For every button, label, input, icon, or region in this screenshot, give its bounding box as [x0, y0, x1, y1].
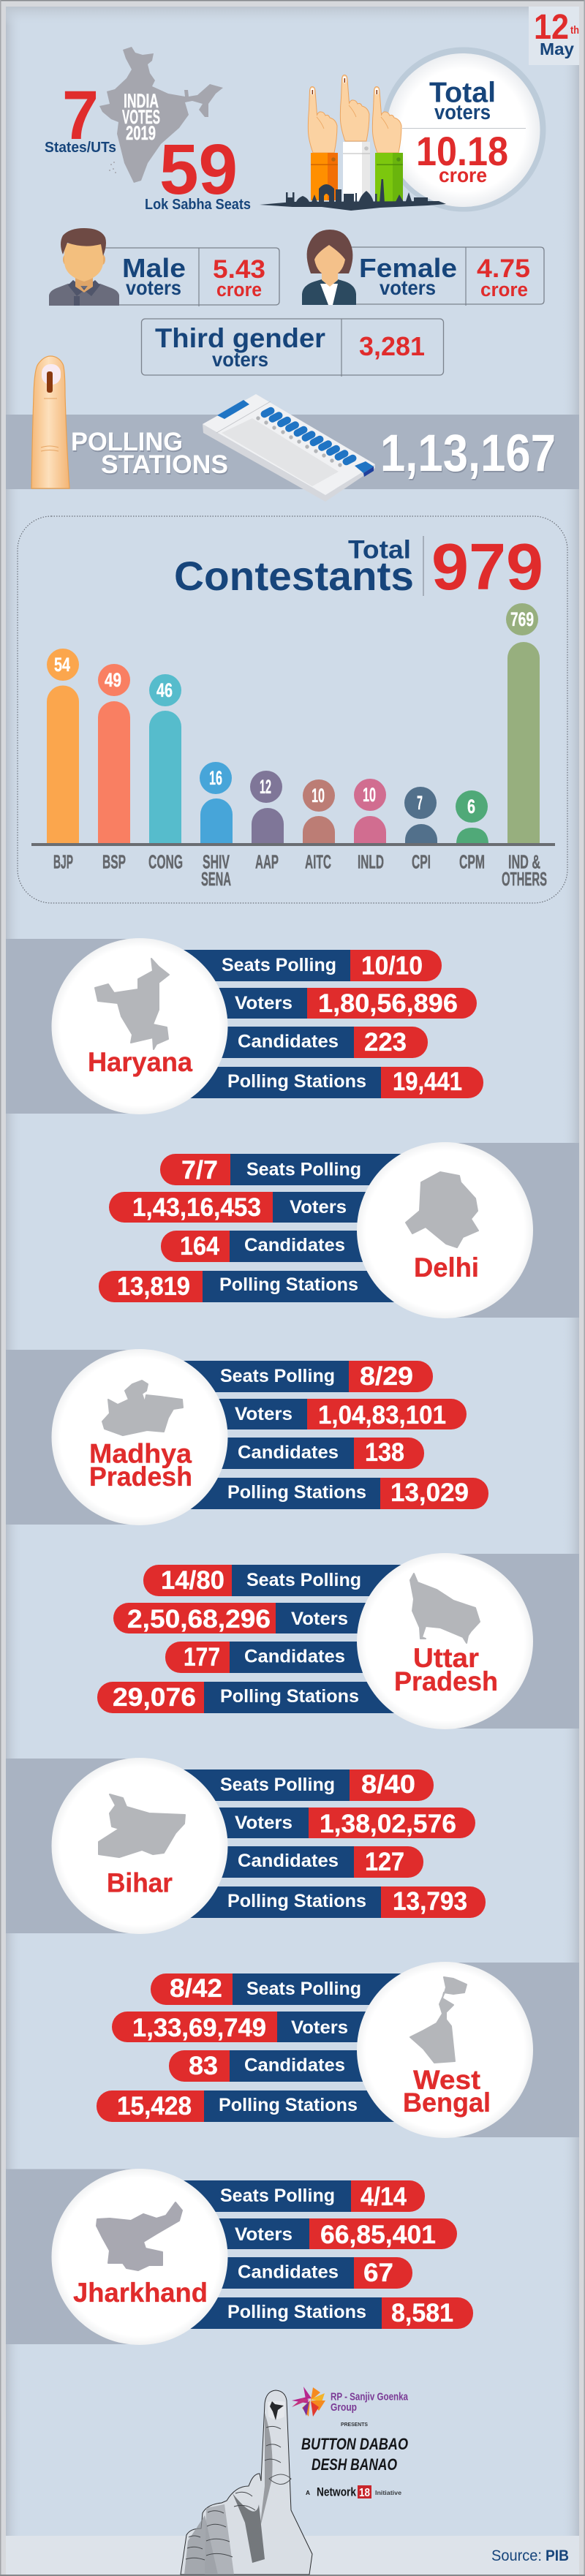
- stat: 7 states: [45, 77, 116, 156]
- row: candidates: 164: [180, 1232, 219, 1261]
- stat: total polling stations: 1,13,167: [380, 425, 556, 483]
- state circle: [51, 938, 228, 1114]
- row: seats polling: Seats Polling: [246, 1160, 361, 1180]
- row: polling stations: [140, 2297, 473, 2329]
- row: candidates: 83: [189, 2052, 218, 2080]
- row: candidates: 223: [364, 1028, 407, 1057]
- heading: India Votes 2019: 2019: [126, 122, 156, 144]
- row: polling stations: 13,793: [393, 1887, 467, 1916]
- row: seats polling: Seats Polling: [246, 1979, 361, 1999]
- map: Haryana: [95, 959, 169, 1049]
- total voters circle: [382, 47, 546, 212]
- row: polling stations: [140, 1067, 483, 1098]
- row: seats polling: [151, 1973, 445, 2005]
- bar: CPM 6: 6: [467, 796, 475, 817]
- state name: [394, 1643, 498, 1696]
- icon: inked finger: [31, 356, 69, 488]
- panel: female voters: crore: [480, 279, 528, 301]
- stat: 59 seats: 59: [159, 129, 238, 209]
- state name: Jharkhand: [73, 2278, 208, 2308]
- bar: Independents and others 769: IND &: [508, 851, 540, 873]
- icon: sketched voting hand: [181, 2390, 312, 2575]
- panel: Uttar Pradesh: [97, 1553, 579, 1729]
- row: voters: 1,38,02,576: [320, 1810, 456, 1838]
- row: voters: Voters: [290, 1197, 347, 1217]
- panel: male voters: 5.43: [213, 255, 265, 284]
- row: candidates: [140, 1846, 423, 1878]
- bar: Shiv Sena 16: [200, 762, 233, 890]
- map: Uttar Pradesh: [410, 1574, 480, 1643]
- logo: RP-Sanjiv Goenka Group: RP - Sanjiv Goenka: [331, 2391, 408, 2403]
- row: voters: Voters: [291, 1609, 348, 1629]
- panel: male voters: Male: [122, 253, 186, 283]
- state name: West: [413, 2065, 480, 2095]
- row: candidates: 127: [365, 1848, 404, 1876]
- row: voters: Voters: [291, 2017, 348, 2038]
- total voters circle: voters: [434, 101, 491, 124]
- bar: INLD 10: [354, 779, 386, 873]
- row: seats polling: [140, 2180, 425, 2212]
- text: Button Dabao Desh Banao: [301, 2435, 408, 2474]
- row: polling stations: 13,029: [390, 1478, 469, 1507]
- row: voters: [109, 1192, 445, 1223]
- map: West Bengal: [410, 1977, 467, 2063]
- date badge: th: [570, 24, 579, 37]
- logo: RP-Sanjiv Goenka Group: Group: [331, 2401, 357, 2414]
- row: candidates: Candidates: [238, 2262, 339, 2283]
- bar: BJP 54: [47, 649, 79, 873]
- row: seats polling: [143, 1565, 445, 1596]
- bar: CPI 7: CPI: [412, 851, 431, 873]
- bar: INLD 10: INLD: [358, 851, 384, 873]
- text: presents: PRESENTS: [341, 2421, 368, 2428]
- row: polling stations: [99, 1271, 445, 1302]
- panel: male voters: voters: [126, 276, 181, 299]
- icon: Delhi skyline: [260, 179, 446, 211]
- state name: Pradesh: [89, 1462, 192, 1492]
- source line: PIB: [546, 2547, 569, 2564]
- row: polling stations: 15,428: [117, 2092, 192, 2120]
- bar: CPM 6: [456, 790, 488, 873]
- row: voters: Voters: [235, 1813, 292, 1833]
- bar: AITC 10: 10: [312, 785, 325, 807]
- bar: Independents and others 769: 769: [510, 608, 534, 630]
- row: candidates: [140, 1438, 424, 1469]
- row: voters: 1,43,16,453: [132, 1193, 261, 1222]
- bar: BSP 49: [98, 664, 130, 873]
- panel: Bihar: [6, 1758, 486, 1934]
- row: seats polling: 8/42: [170, 1974, 222, 2003]
- state name: Pradesh: [394, 1666, 498, 1696]
- bar: AAP 12: 12: [260, 776, 271, 798]
- row: polling stations: Polling Stations: [227, 2302, 366, 2322]
- logo: RP-Sanjiv Goenka Group: [292, 2387, 408, 2417]
- date badge: [529, 7, 579, 65]
- panel: female voters: Female: [359, 253, 457, 283]
- logo: Network18 initiative: [306, 2485, 402, 2499]
- row: candidates: 177: [184, 1643, 220, 1672]
- icon: male voter: [49, 228, 119, 306]
- icon: female voter: [302, 230, 356, 305]
- state name: [89, 1439, 192, 1492]
- row: seats polling: 7/7: [181, 1156, 218, 1185]
- row: voters: [113, 1603, 445, 1633]
- row: polling stations: [97, 1682, 445, 1713]
- row: candidates: Candidates: [244, 2055, 345, 2075]
- panel: male voters: [102, 248, 279, 306]
- logo: Network18 initiative: 18: [359, 2487, 370, 2499]
- row: polling stations: Polling Stations: [227, 1891, 366, 1911]
- row: polling stations: Polling Stations: [220, 1686, 359, 1707]
- row: polling stations: Polling Stations: [227, 1482, 366, 1503]
- total voters circle: 10.18: [416, 128, 508, 174]
- map: Madhya Pradesh: [102, 1380, 183, 1435]
- heading: total contestants: 979: [431, 531, 543, 604]
- date badge: May: [540, 39, 574, 58]
- text: Button Dabao Desh Banao: DESH BANAO: [312, 2455, 397, 2474]
- row: candidates: [165, 1642, 445, 1673]
- stat: 7 states: States/UTs: [45, 140, 116, 156]
- panel: third gender voters: [142, 319, 443, 377]
- panel: female voters: voters: [380, 276, 436, 299]
- icon: India map: [99, 47, 223, 183]
- panel: Haryana: [6, 938, 483, 1114]
- icon: three raised hands: [308, 75, 403, 202]
- heading: total contestants: Total: [348, 535, 411, 564]
- state circle: [357, 1962, 533, 2138]
- bar: AITC 10: [303, 779, 335, 873]
- row: seats polling: 10/10: [361, 952, 423, 980]
- row: polling stations: 13,819: [117, 1272, 190, 1301]
- heading: India Votes 2019: [122, 90, 160, 144]
- band: polling stations: [6, 415, 579, 489]
- state circle: [51, 1758, 228, 1934]
- row: candidates: 67: [363, 2259, 393, 2287]
- row: seats polling: [160, 1154, 445, 1185]
- footer strip: [6, 2536, 579, 2575]
- row: polling stations: [97, 2090, 445, 2122]
- row: polling stations: 29,076: [113, 1683, 196, 1712]
- map: Delhi: [406, 1172, 478, 1247]
- panel: total contestants chart: [18, 516, 567, 903]
- row: seats polling: [140, 1361, 433, 1392]
- logo: Network18 initiative: Network: [317, 2485, 356, 2499]
- bar: BJP 54: BJP: [53, 851, 73, 873]
- row: polling stations: Polling Stations: [219, 1274, 358, 1295]
- panel: Delhi: [99, 1142, 579, 1318]
- row: seats polling: 14/80: [161, 1566, 224, 1595]
- bar: CONG 46: [148, 674, 183, 873]
- row: seats polling: Seats Polling: [220, 1775, 335, 1795]
- state name: Madhya: [89, 1439, 192, 1468]
- row: seats polling: Seats Polling: [222, 955, 336, 975]
- state circle: [357, 1553, 533, 1729]
- icon: electronic voting machine: [203, 394, 375, 502]
- stat: 59 seats: Lok Sabha Seats: [145, 197, 251, 213]
- row: voters: 2,50,68,296: [127, 1605, 271, 1633]
- row: candidates: Candidates: [244, 1235, 345, 1255]
- bar: INLD 10: 10: [363, 784, 376, 806]
- row: voters: 1,04,83,101: [318, 1401, 446, 1429]
- panel: third gender voters: 3,281: [359, 331, 425, 361]
- panel: male voters: crore: [216, 279, 262, 301]
- row: voters: [140, 1808, 475, 1838]
- bar: Shiv Sena 16: SHIV: [203, 851, 230, 873]
- logo: Network18 initiative: A: [306, 2490, 310, 2496]
- row: voters: Voters: [235, 2224, 292, 2245]
- bar: BSP 49: 49: [105, 669, 121, 691]
- heading: total contestants: Contestants: [174, 553, 414, 599]
- bar: Independents and others 769: OTHERS: [502, 868, 547, 890]
- row: seats polling: 4/14: [361, 2183, 407, 2211]
- row: seats polling: [140, 1769, 434, 1801]
- state circle: [51, 2169, 228, 2345]
- text: polling stations: STATIONS: [101, 450, 228, 479]
- row: voters: [140, 988, 477, 1019]
- bar: CPI 7: 7: [417, 792, 423, 814]
- heading: India Votes 2019: INDIA: [124, 90, 159, 112]
- row: candidates: [161, 1231, 445, 1262]
- row: polling stations: [140, 1478, 488, 1509]
- bar: AITC 10: AITC: [305, 851, 331, 873]
- box outline: [102, 248, 279, 305]
- bar: BSP 49: BSP: [102, 851, 126, 873]
- total voters circle: Total: [429, 78, 496, 108]
- row: candidates: 138: [365, 1438, 404, 1467]
- row: voters: 66,85,401: [320, 2221, 436, 2249]
- text: Button Dabao Desh Banao: BUTTON DABAO: [301, 2435, 408, 2453]
- state name: Bihar: [107, 1867, 173, 1898]
- bar: CONG 46: 46: [156, 679, 173, 701]
- row: voters: 1,80,56,896: [318, 989, 458, 1018]
- heading: total contestants: [174, 531, 543, 604]
- row: polling stations: Polling Stations: [227, 1071, 366, 1092]
- row: candidates: [140, 2257, 412, 2289]
- row: seats polling: 8/29: [360, 1362, 413, 1391]
- stat: 7 states: 7: [62, 77, 99, 154]
- bar: Independents and others 769: [502, 603, 547, 890]
- chart axis: [31, 843, 555, 846]
- row: candidates: [169, 2050, 445, 2082]
- bar: AAP 12: [250, 771, 284, 873]
- panel: third gender voters: Third gender: [155, 323, 325, 353]
- state circle: [51, 1349, 228, 1525]
- row: polling stations: 8,581: [391, 2299, 453, 2327]
- row: polling stations: [140, 1886, 486, 1918]
- bar: CPI 7: [404, 787, 437, 873]
- state name: Haryana: [88, 1047, 192, 1077]
- source line: [491, 2547, 569, 2564]
- row: candidates: Candidates: [238, 1851, 339, 1871]
- text: polling stations: [71, 428, 228, 479]
- panel: Madhya Pradesh: [6, 1349, 488, 1525]
- bar: BJP 54: 54: [54, 654, 70, 676]
- state name: Delhi: [414, 1253, 479, 1283]
- bar: Shiv Sena 16: 16: [209, 767, 222, 789]
- row: voters: Voters: [235, 1404, 292, 1424]
- panel: third gender voters: voters: [212, 348, 268, 371]
- bar: CPM 6: CPM: [459, 851, 485, 873]
- row: voters: [112, 2012, 445, 2042]
- row: seats polling: Seats Polling: [220, 1366, 335, 1386]
- heading: India Votes 2019: VOTES: [122, 106, 160, 128]
- bar: Shiv Sena 16: SENA: [201, 868, 231, 890]
- row: voters: [140, 2218, 457, 2249]
- row: voters: Voters: [235, 993, 292, 1013]
- row: seats polling: Seats Polling: [246, 1570, 361, 1590]
- row: candidates: Candidates: [238, 1031, 339, 1051]
- row: seats polling: 8/40: [361, 1770, 415, 1799]
- source line: Source:: [491, 2547, 542, 2564]
- row: seats polling: Seats Polling: [220, 2186, 335, 2206]
- row: polling stations: Polling Stations: [219, 2095, 358, 2115]
- panel: Jharkhand: [6, 2169, 473, 2345]
- date badge: 12: [534, 8, 569, 47]
- map: Bihar: [99, 1794, 185, 1857]
- map: Jharkhand: [97, 2202, 182, 2270]
- state name: Bengal: [403, 2088, 491, 2118]
- row: seats polling: [140, 950, 442, 981]
- bar: CONG 46: CONG: [148, 851, 183, 873]
- panel: female voters: 4.75: [477, 254, 530, 283]
- row: candidates: Candidates: [244, 1647, 345, 1667]
- logo: Network18 initiative: Initiative: [375, 2490, 402, 2496]
- icon: star logo: [292, 2387, 325, 2417]
- state name: [403, 2065, 491, 2118]
- panel: West Bengal: [97, 1962, 579, 2138]
- panel: female voters: [351, 247, 544, 306]
- state name: Uttar: [413, 1643, 479, 1673]
- row: polling stations: 19,441: [393, 1068, 462, 1096]
- state circle: [357, 1142, 533, 1318]
- row: voters: 1,33,69,749: [132, 2014, 266, 2042]
- row: voters: [140, 1399, 467, 1429]
- text: polling stations: POLLING: [71, 428, 183, 456]
- total voters circle: crore: [439, 164, 487, 186]
- row: candidates: Candidates: [238, 1442, 339, 1462]
- bar: AAP 12: AAP: [255, 851, 279, 873]
- row: candidates: [140, 1027, 428, 1058]
- box outline: [351, 247, 544, 304]
